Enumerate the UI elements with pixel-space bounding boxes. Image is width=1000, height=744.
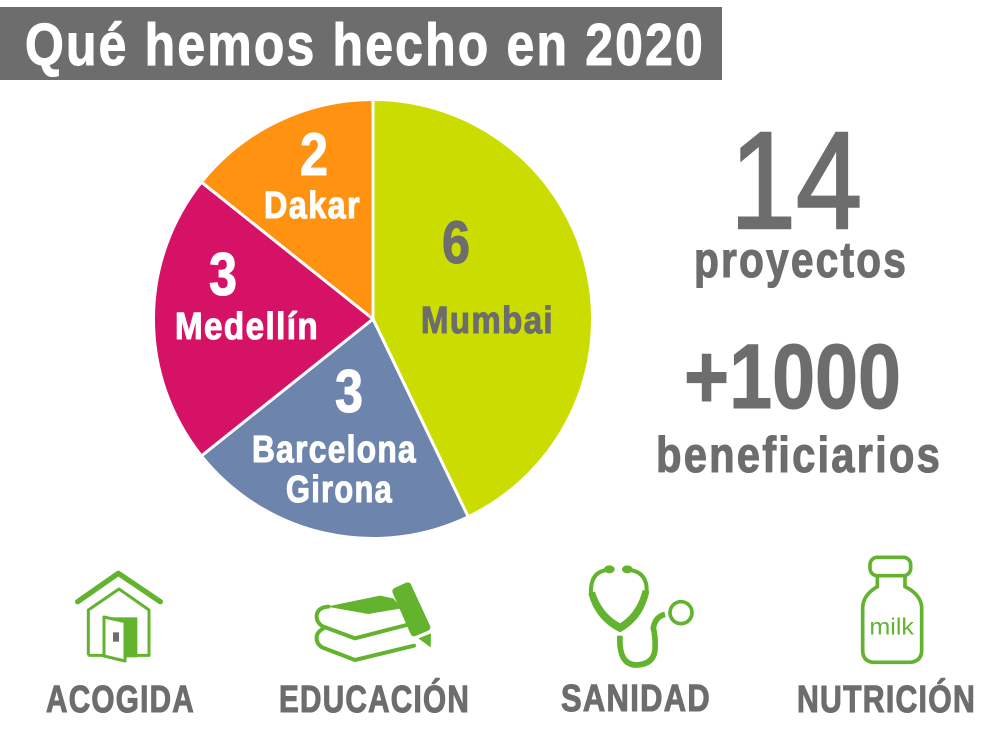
label: 6 Mumbai: Mumbai bbox=[421, 300, 554, 342]
stat: +1000 beneficiarios: +1000 bbox=[684, 326, 901, 428]
pie chart bbox=[153, 100, 593, 539]
slice: Barcelona Girona bbox=[201, 319, 468, 539]
stat: 14 proyectos bbox=[694, 104, 908, 288]
slice: Medellín bbox=[153, 182, 373, 456]
label: ACOGIDA: ACOGIDA bbox=[46, 679, 195, 721]
icon: house bbox=[78, 573, 160, 661]
stat: 14 proyectos: proyectos bbox=[694, 232, 908, 288]
label: 6 Mumbai: 6 bbox=[442, 209, 470, 276]
stat: +1000 beneficiarios: beneficiarios bbox=[656, 427, 942, 483]
slice: Mumbai bbox=[373, 100, 593, 517]
label: 2 Dakar: Dakar bbox=[264, 185, 361, 227]
icon: milk bottle: milk bbox=[869, 613, 915, 639]
label: 2 Dakar: 2 bbox=[300, 121, 328, 188]
label: 3 Medellín bbox=[175, 241, 319, 348]
slice: Dakar bbox=[201, 100, 373, 319]
label: 3 Barcelona Girona: Barcelona bbox=[252, 429, 417, 471]
label: 3 Barcelona Girona: Girona bbox=[286, 469, 393, 511]
label: 3 Medellín: Medellín bbox=[175, 306, 319, 348]
label: EDUCACIÓN: EDUCACIÓN bbox=[279, 677, 470, 721]
label: 6 Mumbai bbox=[421, 209, 554, 342]
icon: books and pencil bbox=[317, 586, 431, 660]
label: SANIDAD: SANIDAD bbox=[561, 678, 711, 720]
label: 2 Dakar bbox=[264, 121, 361, 227]
icon: milk bottle bbox=[863, 557, 922, 662]
title: Qué hemos hecho en 2020 bbox=[25, 12, 705, 78]
stat: +1000 beneficiarios bbox=[656, 326, 942, 483]
label: 3 Barcelona Girona bbox=[252, 358, 417, 511]
label: 3 Medellín: 3 bbox=[209, 241, 237, 308]
stat: 14 proyectos: 14 bbox=[730, 104, 862, 258]
label: 3 Barcelona Girona: 3 bbox=[335, 358, 363, 425]
icon: stethoscope bbox=[588, 565, 692, 665]
